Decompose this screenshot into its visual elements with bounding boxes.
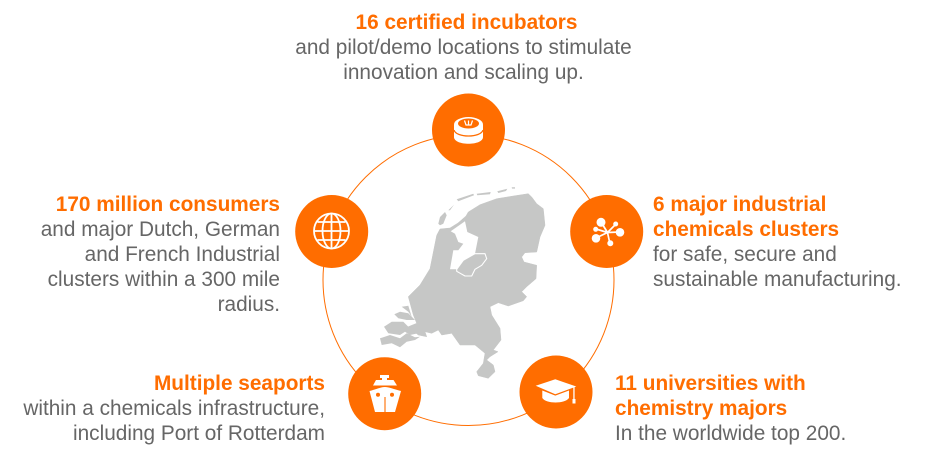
icon: graduation cap [536, 379, 576, 404]
text: seaports: including Port of Rotterdam [73, 422, 325, 445]
node: consumers [295, 195, 368, 268]
text: incubators: innovation and scaling up. [343, 61, 584, 84]
text: universities: In the worldwide top 200. [615, 422, 846, 445]
text: clusters: 6 major industrial [653, 193, 826, 216]
text: seaports: Multiple seaports [154, 372, 325, 395]
icon: coin stack [454, 117, 483, 144]
text: clusters: chemicals clusters [653, 218, 839, 241]
text: consumers: 170 million consumers [56, 193, 280, 216]
node: incubators [432, 94, 505, 166]
text: universities [615, 372, 846, 445]
text: seaports: within a chemicals infrastructure, [22, 397, 325, 420]
icon: molecule network [592, 218, 624, 246]
text: incubators [295, 11, 632, 84]
text: incubators: and pilot/demo locations to stimulate [295, 36, 632, 59]
text: universities: 11 universities with [615, 372, 806, 395]
text: seaports [22, 372, 325, 445]
text: consumers: clusters within a 300 mile [48, 268, 280, 291]
text: clusters: for safe, secure and [653, 243, 837, 266]
text: consumers: radius. [218, 293, 280, 316]
connecting ring [323, 134, 614, 426]
text: clusters [653, 193, 902, 291]
node: universities [520, 356, 592, 428]
text: universities: chemistry majors [615, 397, 787, 420]
text: consumers [41, 193, 280, 316]
text: incubators: 16 certified incubators [356, 11, 577, 34]
node: seaports [348, 357, 421, 430]
text: consumers: and French Industrial [85, 243, 280, 266]
map of the Netherlands [380, 187, 545, 378]
text: clusters: sustainable manufacturing. [653, 268, 902, 291]
icon: ship [370, 375, 401, 412]
text: consumers: and major Dutch, German [41, 218, 280, 241]
node: clusters [570, 195, 643, 268]
icon: globe [314, 214, 349, 248]
